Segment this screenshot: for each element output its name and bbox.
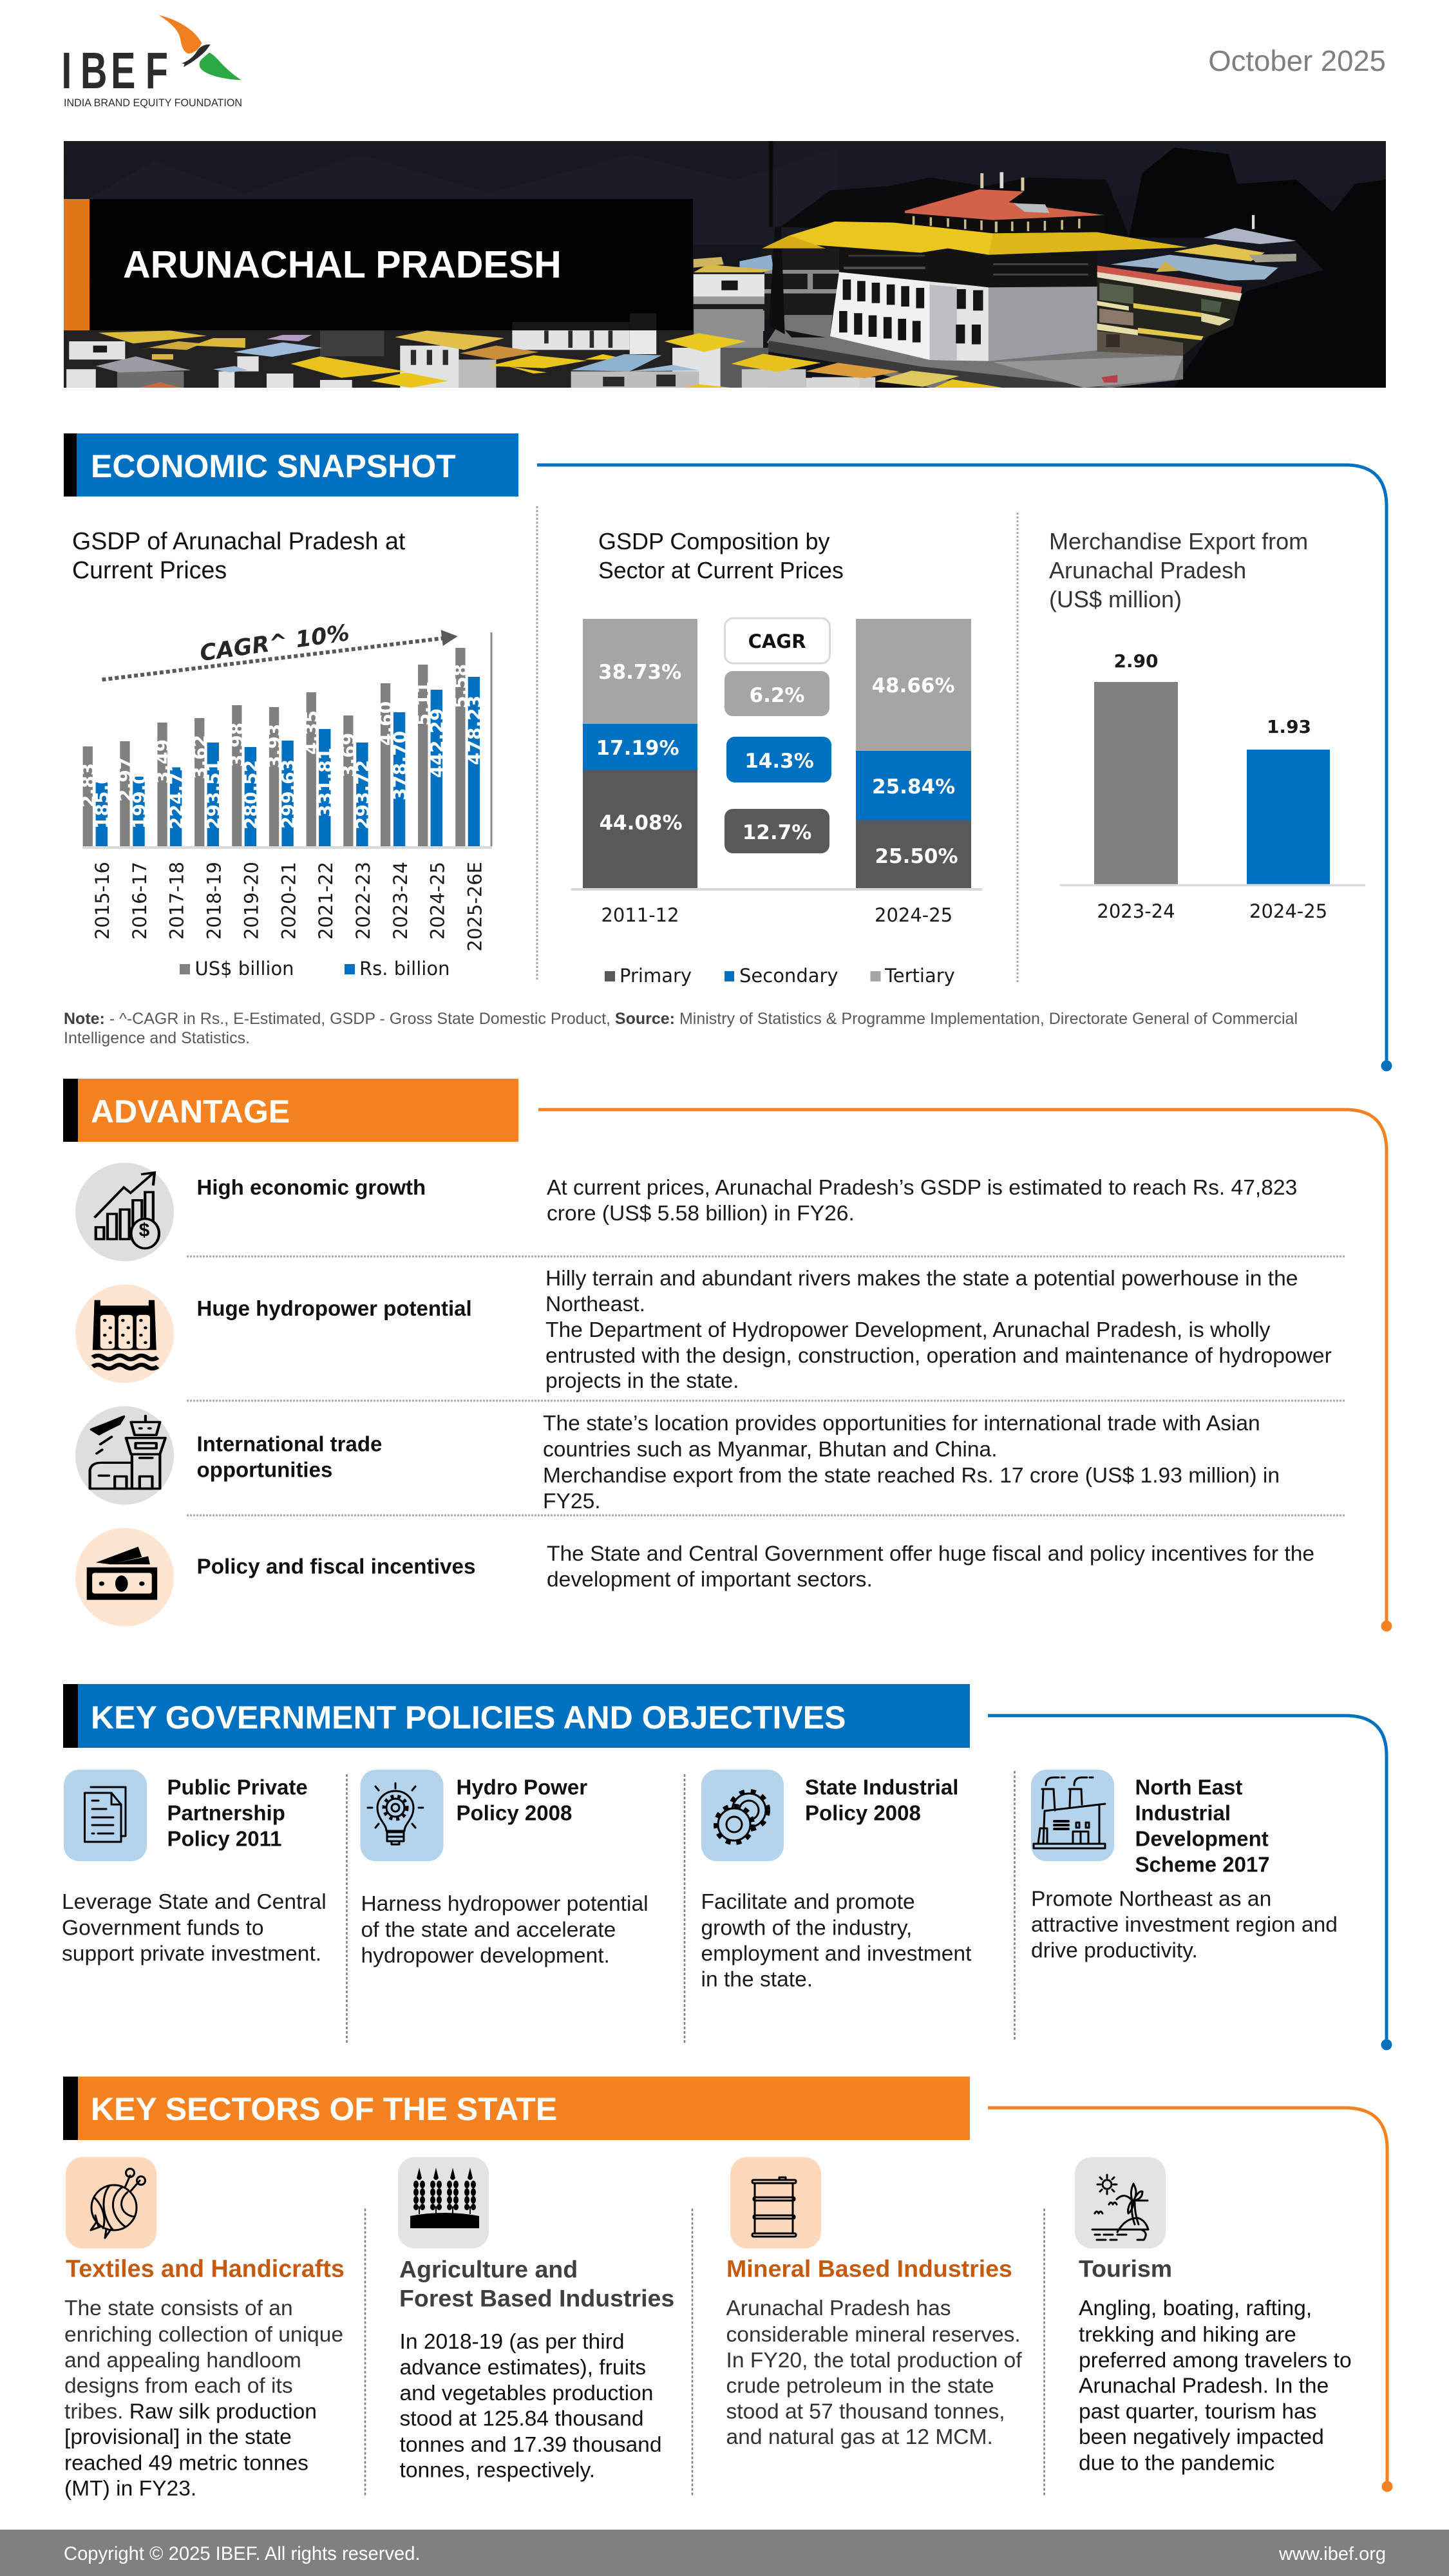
legend: US$ billion [194, 958, 294, 980]
data labels: Rs. billion: 185.09 [91, 759, 113, 829]
title: Scheme 2017 [1135, 1852, 1270, 1877]
data labels: Rs. billion: 478.23 [464, 696, 485, 765]
icon: beach [1075, 2157, 1166, 2249]
sector: mineral based industries [726, 2157, 1022, 2449]
description: designs from each of its [64, 2374, 293, 2398]
CAGR badges: 6.2% [750, 684, 804, 707]
heading bar: policies [63, 1684, 970, 1748]
description: growth of the industry, [701, 1917, 912, 1940]
description: [provisional] in the state [64, 2425, 292, 2449]
icon: gears [701, 1770, 784, 1861]
data labels: US$ billion: 4.35 [301, 710, 322, 755]
policy: public private partnership [62, 1770, 327, 1965]
description: employment and investment [701, 1942, 972, 1965]
title: Tourism [1079, 2255, 1172, 2282]
icon: bulb with gear [361, 1770, 443, 1861]
description: stood at 125.84 thousand [399, 2407, 644, 2430]
data labels: US$ billion: 3.69 [338, 733, 359, 777]
heading bar: advantage: ADVANTAGE [91, 1094, 290, 1130]
icon: wheat [398, 2157, 489, 2249]
legend: Secondary [739, 965, 838, 987]
bar labels: 17.19% [596, 737, 679, 760]
chart: GSDP composition by sector [571, 528, 982, 987]
data labels: US$ billion: 2.97 [115, 757, 136, 802]
icon: dam [75, 1284, 174, 1383]
section: economic snapshot [64, 433, 1392, 1072]
description: and natural gas at 12 MCM. [726, 2425, 993, 2449]
description: tribes. [64, 2400, 129, 2424]
description: support private investment. [62, 1942, 321, 1965]
title: Policy 2008 [805, 1801, 921, 1825]
legend: Rs. billion [359, 958, 450, 980]
logo: IBEF: IBEF [61, 42, 168, 99]
data labels: Rs. billion: 299.63 [278, 759, 299, 829]
legend: Primary [620, 965, 692, 987]
bar labels: 44.08% [599, 811, 683, 835]
section: key government policies [62, 1684, 1392, 2050]
description: preferred among travelers to [1079, 2349, 1352, 2372]
policy: north east industrial [1031, 1770, 1338, 1963]
title: North East [1135, 1775, 1242, 1799]
data labels: US$ billion: 3.93 [263, 724, 285, 768]
chart: merchandise export: 2.90 [1113, 650, 1159, 672]
bar labels: 48.66% [871, 674, 955, 697]
description: reached 49 metric tonnes [64, 2451, 308, 2476]
title: Hydro Power [456, 1775, 587, 1799]
label: Huge hydropower potential [197, 1296, 472, 1320]
description: drive productivity. [1031, 1938, 1198, 1963]
connector line: orange [538, 1110, 1392, 1632]
description: tonnes, respectively. [399, 2459, 595, 2482]
icon: growth chart [75, 1163, 174, 1261]
chart: GSDP composition by sector: 2011-12 [601, 904, 679, 926]
description: Northeast. [545, 1293, 645, 1316]
arrow: CAGR trend [102, 620, 458, 679]
description: advance estimates), fruits [399, 2356, 646, 2380]
description: Facilitate and promote [701, 1890, 915, 1914]
description: Arunachal Pradesh. In the [1079, 2374, 1329, 2398]
axis labels: years: 2016-17 [129, 862, 151, 940]
description: considerable mineral reserves. [726, 2323, 1021, 2347]
policy: state industrial [701, 1770, 972, 1991]
legend [605, 965, 955, 987]
description: and vegetables production [399, 2382, 653, 2405]
axis labels: years: 2017-18 [166, 862, 188, 940]
data labels: Rs. billion: 280.52 [240, 760, 261, 829]
data labels: Rs. billion: 442.29 [426, 708, 448, 778]
label: Policy and fiscal incentives [197, 1555, 476, 1579]
description: FY25. [543, 1490, 601, 1513]
CAGR badges: 12.7% [743, 821, 811, 844]
chart: merchandise export: 2023-24 [1097, 900, 1175, 922]
icon: factory [1031, 1770, 1114, 1861]
axis labels: years: 2022-23 [352, 862, 374, 940]
chart: GSDP composition by sector: 2024-25 [875, 904, 952, 926]
chart title: (US$ million) [1049, 586, 1182, 612]
heading bar: economic snapshot: ECONOMIC SNAPSHOT [91, 448, 456, 484]
icon: growth chart: $ [139, 1220, 150, 1241]
data labels: US$ billion: 3.49 [152, 739, 173, 784]
description: tonnes and 17.39 thousand [399, 2433, 662, 2457]
axis labels: years: 2015-16 [91, 862, 113, 940]
legend [180, 958, 450, 980]
label: opportunities [197, 1458, 332, 1481]
right wing [1097, 274, 1242, 355]
description: Angling, boating, rafting, [1079, 2297, 1312, 2320]
chart: merchandise export: 1.93 [1267, 716, 1311, 737]
footer [0, 2530, 1449, 2576]
title: Partnership [167, 1801, 285, 1825]
description: due to the pandemic [1079, 2451, 1274, 2476]
CAGR badges: CAGR [748, 630, 806, 652]
icon: yarn [66, 2157, 156, 2249]
axis labels: years [91, 862, 486, 952]
description: Merchandise export from the state reached Rs. 17 crore (US$ 1.93 million) in [543, 1464, 1280, 1488]
connector line: orange [988, 2108, 1392, 2492]
icon: oil barrel [730, 2157, 821, 2249]
data labels: Rs. billion: 293.51 [203, 760, 224, 829]
description: (MT) in FY23. [64, 2477, 196, 2501]
description: attractive investment region and [1031, 1913, 1338, 1937]
legend: Tertiary [884, 965, 955, 987]
CAGR badges [724, 618, 831, 853]
description: In 2018-19 (as per third [399, 2330, 625, 2354]
chart: merchandise export: 2024-25 [1249, 900, 1327, 922]
description: hydropower development. [361, 1944, 610, 1968]
description: Harness hydropower potential [361, 1892, 649, 1916]
chart title: Current Prices [72, 556, 227, 583]
heading bar: key sectors [63, 2076, 970, 2140]
description: projects in the state. [545, 1369, 739, 1393]
data labels: US$ billion: 4.60 [375, 701, 396, 746]
title: State Industrial [805, 1775, 958, 1799]
axis labels: years: 2021-22 [315, 862, 337, 940]
main tower [830, 272, 930, 360]
sector: tourism [1075, 2157, 1352, 2476]
source note: Intelligence and Statistics. [64, 1029, 250, 1047]
description: The state’s location provides opportunities for international trade with Asian [543, 1412, 1260, 1435]
data labels: Rs. billion [91, 696, 485, 829]
data labels: US$ billion: 3.98 [227, 723, 248, 767]
heading bar: economic snapshot [64, 433, 518, 497]
yellow roof [762, 222, 1188, 255]
axis labels: years: 2024-25 [427, 862, 449, 940]
data labels: Rs. billion: 224.71 [166, 760, 187, 829]
data labels: US$ billion: 2.83 [77, 763, 99, 808]
CAGR badges: 14.3% [744, 750, 814, 773]
label: High economic growth [197, 1175, 426, 1199]
heading bar: key sectors: KEY SECTORS OF THE STATE [91, 2091, 557, 2127]
row: huge hydropower potential [75, 1267, 1332, 1393]
row: policy and fiscal incentives [75, 1528, 1314, 1627]
title: Agriculture and [399, 2255, 578, 2282]
title: Policy 2008 [456, 1801, 572, 1825]
sector: agriculture and forest [398, 2157, 674, 2482]
axis labels: years: 2020-21 [278, 862, 299, 940]
icon: documents [64, 1770, 147, 1861]
description: Hilly terrain and abundant rivers makes the state a potential powerhouse in the [545, 1267, 1298, 1291]
ground [767, 315, 1183, 388]
dark trees [781, 178, 1129, 236]
heading bar: advantage [63, 1079, 518, 1142]
title: Industrial [1135, 1801, 1231, 1825]
connector line: blue [988, 1716, 1392, 2050]
source note: Note: - ^-CAGR in Rs., E-Estimated, GSDP - Gross State Domestic Product, Source: Ministry of Statistics & Programme Implementation, Directorate General of Commercial [64, 1010, 1298, 1028]
row: high economic growth [75, 1163, 1297, 1261]
description: in the state. [701, 1968, 813, 1991]
axis labels: years: 2023-24 [390, 862, 412, 940]
description: of the state and accelerate [361, 1918, 616, 1942]
title: Textiles and Handicrafts [66, 2255, 345, 2282]
description: In FY20, the total production of [726, 2349, 1022, 2372]
description: countries such as Myanmar, Bhutan and China. [543, 1437, 998, 1462]
description: Leverage State and Central [62, 1890, 327, 1914]
chart title: Sector at Current Prices [598, 558, 844, 583]
logo: IBEF [61, 15, 242, 109]
data labels: Rs. billion: 199.03 [129, 759, 150, 829]
heading bar: policies: KEY GOVERNMENT POLICIES AND OBJECTIVES [91, 1700, 846, 1736]
logo: IBEF: INDIA BRAND EQUITY FOUNDATION [64, 97, 242, 109]
chart title: Merchandise Export from [1049, 528, 1308, 554]
icon: airport [75, 1406, 174, 1504]
data labels: US$ billion: 3.62 [189, 735, 211, 779]
title: Policy 2011 [167, 1826, 281, 1851]
bar labels [596, 661, 958, 868]
footer: Copyright © 2025 IBEF. All rights reserved. [64, 2544, 421, 2564]
section: advantage [63, 1079, 1392, 1632]
title: Public Private [167, 1775, 308, 1799]
data labels: US$ billion [77, 664, 471, 808]
section: key sectors [63, 2076, 1392, 2501]
hero banner: monastery photo with title [64, 141, 1386, 388]
data labels: US$ billion: 5.58 [450, 664, 471, 708]
description: Government funds to [62, 1917, 264, 1940]
axis labels: years: 2019-20 [240, 862, 262, 940]
description: past quarter, tourism has [1079, 2400, 1317, 2424]
description: been negatively impacted [1079, 2425, 1324, 2449]
data labels: Rs. billion: 331.81 [315, 748, 336, 817]
title panel: ARUNACHAL PRADESH [123, 243, 562, 286]
icon: money [75, 1528, 174, 1627]
description: enriching collection of unique [64, 2323, 343, 2347]
bar labels: 38.73% [598, 661, 681, 684]
footer: www.ibef.org [1278, 2544, 1386, 2564]
description: Promote Northeast as an [1031, 1887, 1271, 1911]
axis labels: years: 2025-26E [464, 862, 486, 952]
back left building [762, 249, 842, 319]
description: Raw silk production [129, 2400, 317, 2424]
chart title: GSDP Composition by [598, 528, 829, 554]
row: international trade opportunities [75, 1406, 1280, 1513]
title panel [64, 199, 693, 330]
description: The state consists of an [64, 2297, 293, 2320]
data labels: Rs. billion: 378.70 [389, 731, 410, 800]
description: development of important sectors. [547, 1567, 873, 1592]
connector line: blue [537, 465, 1392, 1072]
description: crore (US$ 5.58 billion) in FY26. [547, 1202, 855, 1226]
bar labels: 25.84% [872, 775, 955, 799]
village [64, 309, 726, 388]
label: International trade [197, 1432, 382, 1455]
description: crude petroleum in the state [726, 2374, 994, 2398]
description: and appealing handloom [64, 2349, 301, 2372]
data labels: US$ billion: 5.11 [413, 681, 434, 726]
title: Forest Based Industries [399, 2285, 674, 2312]
arrow: CAGR trend: CAGR^ 10% [198, 620, 351, 667]
axis labels: years: 2018-19 [204, 862, 225, 940]
chart: GSDP at current prices [72, 527, 492, 980]
policy: hydro power [361, 1770, 649, 1968]
description: stood at 57 thousand tonnes, [726, 2400, 1005, 2424]
red roof [905, 189, 1104, 220]
chart title: GSDP of Arunachal Pradesh at [72, 527, 405, 554]
lower roofs [812, 377, 875, 388]
date: October 2025 [1208, 44, 1386, 77]
chart: merchandise export [1049, 528, 1365, 922]
bar labels: 25.50% [875, 845, 958, 868]
title: Mineral Based Industries [726, 2255, 1012, 2282]
data labels: Rs. billion: 293.72 [352, 760, 374, 829]
chart title: Arunachal Pradesh [1049, 557, 1246, 583]
description: At current prices, Arunachal Pradesh’s GSDP is estimated to reach Rs. 47,823 [547, 1176, 1297, 1200]
description: entrusted with the design, construction, operation and maintenance of hydropower [545, 1344, 1332, 1368]
description: The Department of Hydropower Development, Arunachal Pradesh, is wholly [545, 1318, 1271, 1342]
top storey [989, 233, 999, 234]
description: trekking and hiking are [1079, 2323, 1296, 2347]
description: The State and Central Government offer huge fiscal and policy incentives for the [547, 1542, 1314, 1566]
sector: textiles and handicrafts [64, 2157, 345, 2501]
description: Arunachal Pradesh has [726, 2297, 951, 2320]
title: Development [1135, 1826, 1269, 1851]
